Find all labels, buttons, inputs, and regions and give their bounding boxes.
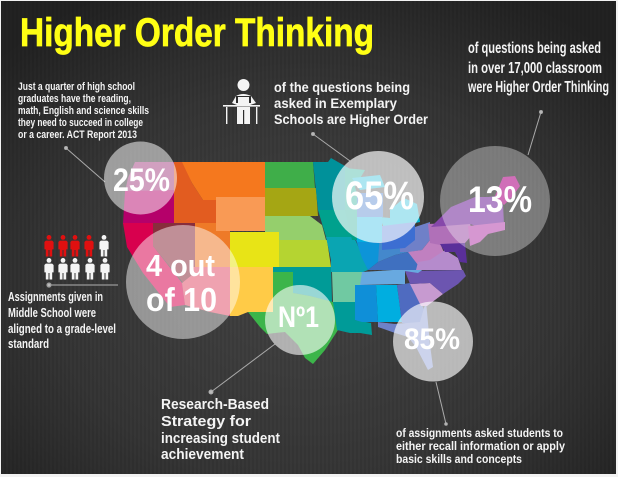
colored map of the United States (123, 158, 520, 370)
text: quarter of graduates: or a career. ACT Report 2013 (18, 129, 137, 141)
text: quarter of graduates: they need to succeed in college (18, 117, 143, 129)
stat: 85%: 85% (404, 323, 460, 356)
text: 17,000 classrooms (467, 40, 609, 96)
circle: 85% (393, 302, 473, 382)
stat: 65%: 65% (345, 174, 414, 218)
text: quarter of graduates: graduates have the reading, (18, 93, 131, 105)
text: research-based strategy: Research-Based (161, 397, 269, 413)
leader line: 4 out of 10 (47, 283, 118, 287)
text: middle school assignments: Middle School were (8, 305, 96, 320)
icon: student reading at desk (223, 79, 260, 124)
stat: No 1: Nº1 (278, 301, 319, 334)
text: research-based strategy: increasing student (161, 431, 280, 447)
leader line: 13% (528, 110, 542, 155)
text: exemplary schools (274, 79, 428, 127)
circle: 4 out of 10 (126, 225, 240, 339)
text: recall assignments: of assignments asked students to (396, 428, 563, 440)
text: middle school assignments (8, 289, 116, 351)
pictogram: 4 of 10 people (44, 235, 110, 280)
text: exemplary schools: of the questions being (274, 79, 410, 95)
leader line: No 1 (209, 344, 275, 394)
text: exemplary schools: Schools are Higher Order (274, 111, 428, 127)
text: middle school assignments: Assignments given in (8, 289, 103, 304)
text: recall assignments: basic skills and concepts (396, 454, 522, 466)
text: middle school assignments: standard (8, 336, 49, 351)
text: middle school assignments: aligned to a grade-level (8, 321, 116, 336)
stat: 4 out of 10: of 10 (146, 281, 217, 318)
text: quarter of graduates: math, English and science skills (18, 105, 149, 117)
text: research-based strategy: achievement (161, 447, 244, 463)
stat: 25%: 25% (113, 162, 170, 198)
stat: 4 out of 10: 4 out (146, 248, 215, 283)
stat: 4 out of 10 (146, 248, 217, 318)
text: recall assignments: either recall information or apply (396, 441, 566, 453)
leader line: 65% (312, 132, 350, 161)
circle: 13% (440, 146, 550, 256)
leader line: 85% (436, 382, 447, 425)
text: quarter of graduates: Just a quarter of high school (18, 81, 135, 93)
text: exemplary schools: asked in Exemplary (274, 95, 397, 111)
text: recall assignments (396, 428, 566, 466)
text: research-based strategy (161, 397, 280, 463)
stat: 13%: 13% (468, 179, 532, 220)
title: Higher Order Thinking (20, 11, 374, 55)
circle: 25% (104, 142, 177, 214)
text: quarter of graduates (18, 81, 149, 141)
circle: 65% (332, 151, 424, 243)
circle: No 1 (265, 285, 335, 355)
leader line: 25% (64, 146, 105, 182)
text: research-based strategy: Strategy for (161, 414, 251, 430)
